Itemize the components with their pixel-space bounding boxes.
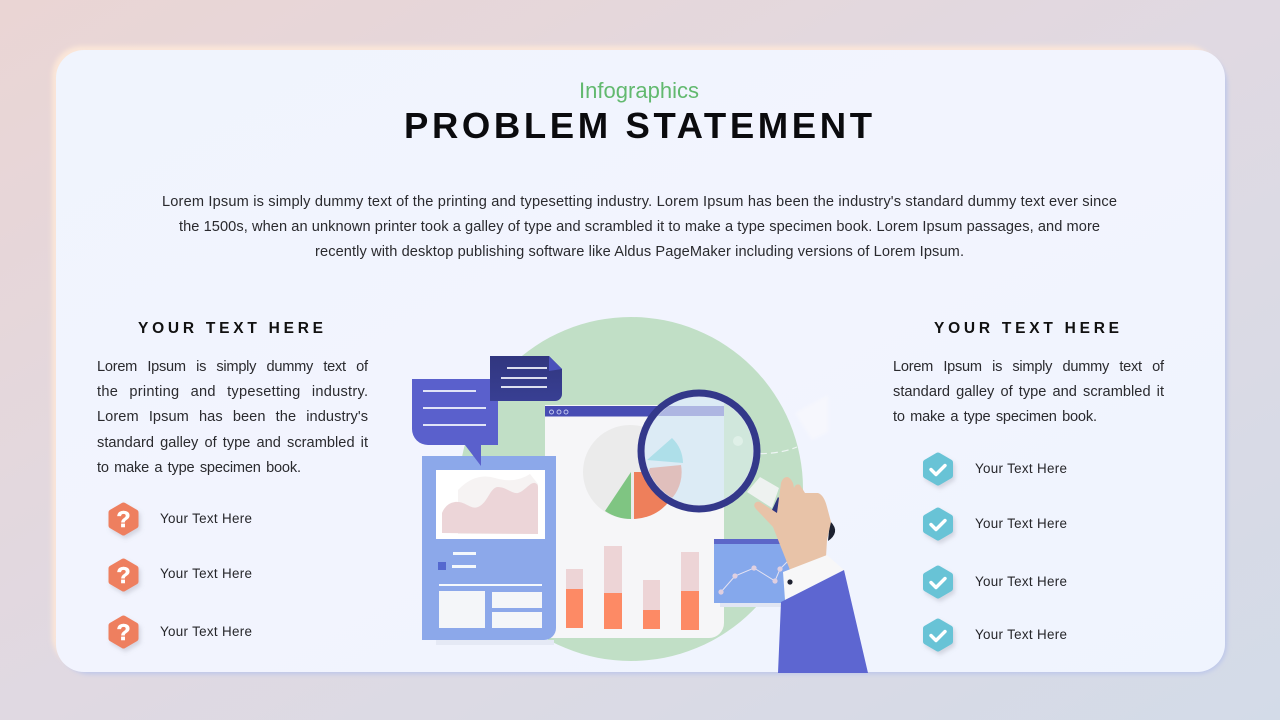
item: check 3: [926, 568, 1067, 596]
item: check 3: Your Text Here: [975, 574, 1067, 589]
document note: [490, 356, 562, 401]
intro paragraph: recently with desktop publishing software like Aldus PageMaker including versions of Lorem Ipsum.: [315, 244, 964, 260]
bar chart: [566, 546, 699, 630]
pie chart: [583, 425, 677, 519]
item: check 4: [926, 622, 1067, 648]
left text block: to make a type specimen book.: [97, 460, 301, 476]
right text block: [893, 359, 1165, 425]
left text block: Lorem Ipsum has been the industry's: [97, 409, 368, 425]
right heading: YOUR TEXT HERE: [934, 320, 1119, 337]
right text block: to make a type specimen book.: [893, 409, 1097, 425]
item: question 1: [112, 506, 252, 532]
shirt cuff: [783, 555, 844, 600]
magnifying glass: [640, 393, 835, 541]
hand: [754, 477, 831, 570]
item: question 1: Your Text Here: [160, 511, 252, 526]
illustration: data analysis: [412, 317, 868, 673]
subtitle: Infographics: [579, 78, 699, 103]
intro paragraph: the 1500s, when an unknown printer took a galley of type and scrambled it to make a type specimen book. Lorem Ipsum passages, and more: [179, 219, 1100, 235]
item: check 4: Your Text Here: [975, 627, 1067, 642]
item: question 2: [112, 562, 252, 588]
item: check 1: [926, 456, 1067, 482]
green circle backdrop: [459, 317, 803, 661]
title: PROBLEM STATEMENT: [404, 105, 872, 146]
decorative paper plane and dashed path: [727, 395, 828, 454]
left heading: YOUR TEXT HERE: [138, 320, 323, 337]
left text block: [97, 359, 369, 476]
speech bubble: [412, 379, 498, 466]
left text block: the printing and typesetting industry.: [97, 384, 368, 400]
item: question 2: ?: [116, 562, 131, 588]
item: question 2: Your Text Here: [160, 566, 252, 581]
item: question 3: Your Text Here: [160, 624, 252, 639]
item: question 3: [112, 618, 252, 646]
left list: [112, 506, 252, 646]
right list: [926, 456, 1067, 648]
item: check 2: Your Text Here: [975, 516, 1067, 531]
left text block: standard galley of type and scrambled it: [97, 435, 368, 451]
item: check 2: [926, 510, 1067, 538]
item: question 3: ?: [116, 619, 131, 645]
item: question 1: ?: [116, 506, 131, 532]
browser window: [545, 405, 724, 638]
left text block: Lorem Ipsum is simply dummy text of: [97, 359, 369, 375]
small line chart window: [714, 539, 792, 607]
sleeve: [778, 570, 868, 673]
right text block: standard galley of type and scrambled it: [893, 384, 1164, 400]
intro paragraph: Lorem Ipsum is simply dummy text of the printing and typesetting industry. Lorem Ipsum has been the industry's standard dummy text ever since: [162, 194, 1117, 210]
right text block: Lorem Ipsum is simply dummy text of: [893, 359, 1165, 375]
item: check 1: Your Text Here: [975, 461, 1067, 476]
report panel: [422, 456, 556, 645]
intro paragraph: [162, 194, 1117, 260]
